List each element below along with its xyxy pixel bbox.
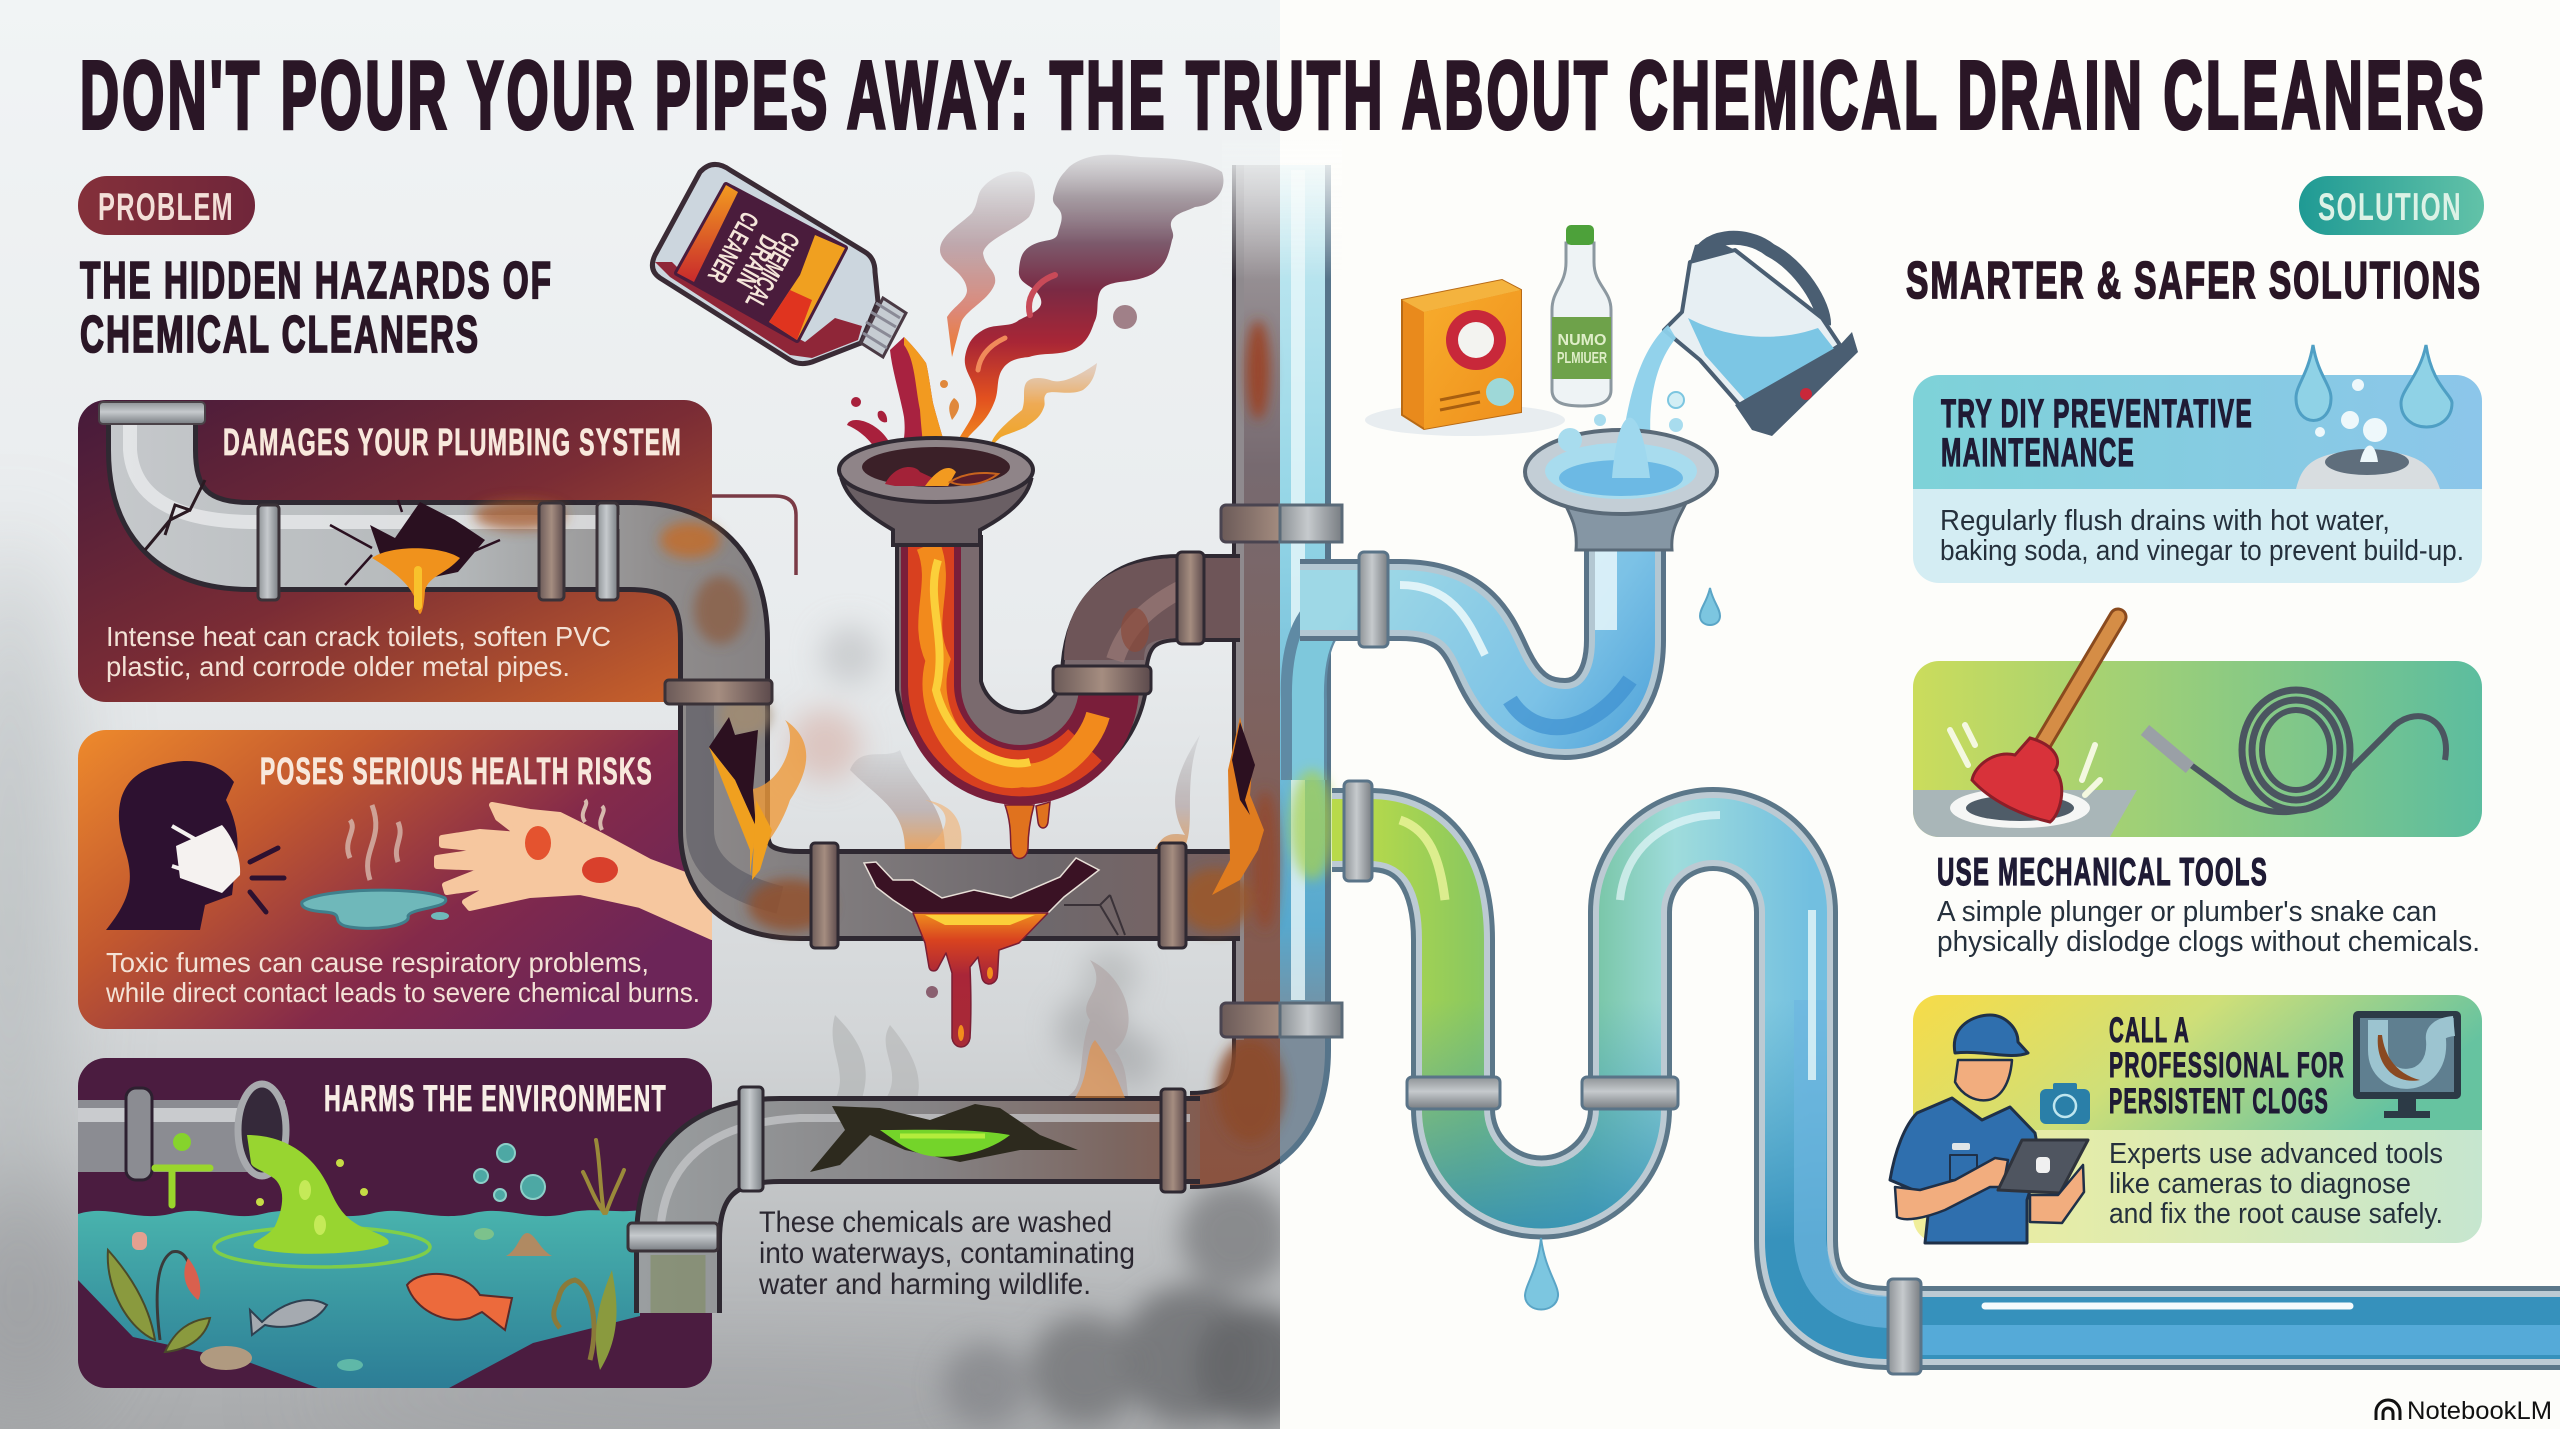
smoke haze on left half	[0, 540, 1315, 1427]
icon: baking soda box	[1365, 280, 1565, 436]
main stack clamps	[1221, 505, 1342, 1037]
cracked left pipe with flames	[709, 717, 1264, 895]
heading: DIY: MAINTENANCE	[1941, 431, 2135, 475]
rust patches	[474, 320, 1284, 1142]
pipe: left trap with lava	[928, 535, 1240, 776]
main crack with lava drip	[864, 858, 1125, 1047]
water plants	[108, 1250, 617, 1370]
icon: water kettle	[1664, 238, 1858, 436]
text: damages plumbing body	[106, 621, 611, 682]
snake pipe flanges	[1344, 781, 1921, 1374]
plumbing panel flanges	[99, 402, 1186, 1251]
fish	[250, 1274, 512, 1335]
bottle label text: DRAIN	[731, 230, 784, 294]
right drain funnel	[1525, 392, 1717, 550]
reed above water	[583, 1140, 624, 1213]
badge: solution: SOLUTION	[2318, 186, 2462, 229]
heading: hidden hazards: CHEMICAL CLEANERS	[80, 306, 480, 364]
icon: drain snake coil	[2145, 690, 2446, 812]
bottle label text: CHEMICAL	[739, 227, 806, 314]
smoke wisps between pipes	[833, 735, 1200, 1105]
heading: health risks: POSES SERIOUS HEALTH RISKS	[260, 751, 653, 793]
fade of main pipe at top	[1222, 140, 1342, 280]
panel: call a professional	[1913, 995, 2482, 1243]
text: environment body: These chemicals are washed	[759, 1206, 1112, 1239]
text: professional body	[2109, 1138, 2443, 1230]
pipe: blue connector down to main stack	[1304, 600, 1370, 780]
text: professional body: like cameras to diagnose	[2109, 1168, 2411, 1200]
heading: DIY: TRY DIY PREVENTATIVE	[1941, 392, 2253, 436]
mound and stones	[132, 1228, 552, 1371]
NotebookLM watermark: NotebookLM	[2407, 1397, 2552, 1425]
pipe: blue trap with clean water	[1300, 530, 1630, 727]
panel: DIY maintenance	[1913, 375, 2482, 583]
heading: DIY	[1941, 392, 2253, 475]
heading: mechanical tools: USE MECHANICAL TOOLS	[1937, 851, 2268, 894]
icon: masked head silhouette	[106, 761, 284, 930]
text: environment body: water and harming wildlife.	[758, 1268, 1091, 1301]
heading: call a professional: PERSISTENT CLOGS	[2109, 1082, 2329, 1121]
text: DIY body: baking soda, and vinegar to prevent build-up.	[1940, 535, 2464, 567]
heading: hidden hazards	[80, 252, 553, 364]
left drain funnel	[839, 438, 1033, 545]
text: professional body: Experts use advanced tools	[2109, 1138, 2443, 1170]
icon: burned hand and arm	[437, 800, 712, 937]
outfall pipe	[70, 1084, 286, 1205]
water body	[78, 1210, 640, 1388]
text: health risks body	[105, 947, 700, 1008]
chemical pour stream	[847, 337, 959, 477]
pipe: main right blue vertical	[1280, 165, 1331, 1164]
text: environment body: into waterways, contaminating	[759, 1237, 1135, 1270]
icon: small water drop beside trap	[1700, 588, 1720, 625]
pipe: lower run gray to rust	[660, 1118, 1200, 1313]
badge: solution	[2299, 176, 2484, 235]
badge: problem: PROBLEM	[98, 186, 234, 229]
icon: drain with bubbles	[2296, 379, 2440, 489]
green tint where snake meets main pipe	[1290, 770, 1334, 880]
text: damages plumbing body: Intense heat can crack toilets, soften PVC	[106, 621, 611, 652]
text: DIY body: Regularly flush drains with hot water,	[1940, 505, 2390, 537]
panel: health risks	[78, 730, 712, 1029]
panel: harms environment	[70, 1058, 712, 1388]
icon: water drop under snake pipe	[1525, 1238, 1558, 1310]
text: DIY body	[1940, 505, 2464, 567]
connector line from plumbing panel	[712, 496, 796, 575]
green crack in lower pipe	[810, 1040, 1125, 1172]
bottle label text: CLEANER	[702, 207, 765, 288]
pipe: upper run through plumbing panel to main stack	[130, 320, 1284, 1142]
pipe: green to blue snake pipe	[1332, 815, 2560, 1340]
pipe: inner blue connector highlight	[1308, 600, 1370, 780]
water stream from kettle	[1618, 325, 1676, 480]
text: mechanical tools body: physically dislodge clogs without chemicals.	[1937, 926, 2480, 958]
text: environment body	[758, 1206, 1135, 1301]
toxic green stream	[214, 1135, 430, 1267]
heading: harms environment: HARMS THE ENVIRONMENT	[324, 1078, 667, 1119]
heading: call a professional: CALL A	[2109, 1011, 2190, 1050]
vinegar label text: NUMO	[1558, 332, 1606, 349]
heading: call a professional: PROFESSIONAL FOR	[2109, 1046, 2345, 1085]
icon: large water drops	[2296, 345, 2452, 427]
heading: call a professional	[2109, 1011, 2345, 1121]
text: health risks body: Toxic fumes can cause respiratory problems,	[106, 947, 649, 978]
text: health risks body: while direct contact leads to severe chemical burns.	[105, 977, 700, 1008]
bottle label text	[702, 207, 806, 314]
icon: chemical bottle	[652, 164, 906, 364]
icon: vinegar bottle	[1552, 225, 1611, 406]
icon: camera	[2040, 1083, 2090, 1124]
vinegar label text: PLMIUER	[1557, 350, 1607, 367]
heading: damages plumbing: DAMAGES YOUR PLUMBING SYSTEM	[223, 422, 682, 464]
icon: plunger	[1950, 617, 2118, 822]
heading: hidden hazards: THE HIDDEN HAZARDS OF	[80, 252, 553, 310]
plumbing panel crack with lava	[145, 480, 500, 614]
icon: chemical puddle with steam	[302, 805, 449, 928]
text: mechanical tools body	[1937, 896, 2480, 958]
smoke plumes above left drain	[940, 155, 1223, 460]
panel: mechanical tools illustration	[1913, 661, 2482, 837]
panel: damages plumbing background	[78, 400, 712, 702]
text: professional body: and fix the root cause safely.	[2109, 1198, 2443, 1230]
lava drips under trap	[1005, 802, 1050, 858]
bubbles	[474, 1144, 545, 1201]
icon: plumber with tablet	[1890, 1015, 2088, 1243]
pipe: main left rusty vertical	[1190, 165, 1281, 1140]
text: damages plumbing body: plastic, and corrode older metal pipes.	[106, 651, 570, 682]
badge: problem	[78, 176, 255, 235]
text: mechanical tools body: A simple plunger or plumber's snake can	[1937, 896, 2437, 928]
vinegar label text	[1557, 332, 1607, 367]
icon: inspection monitor	[2353, 1011, 2461, 1118]
blue trap flange	[1359, 552, 1388, 647]
